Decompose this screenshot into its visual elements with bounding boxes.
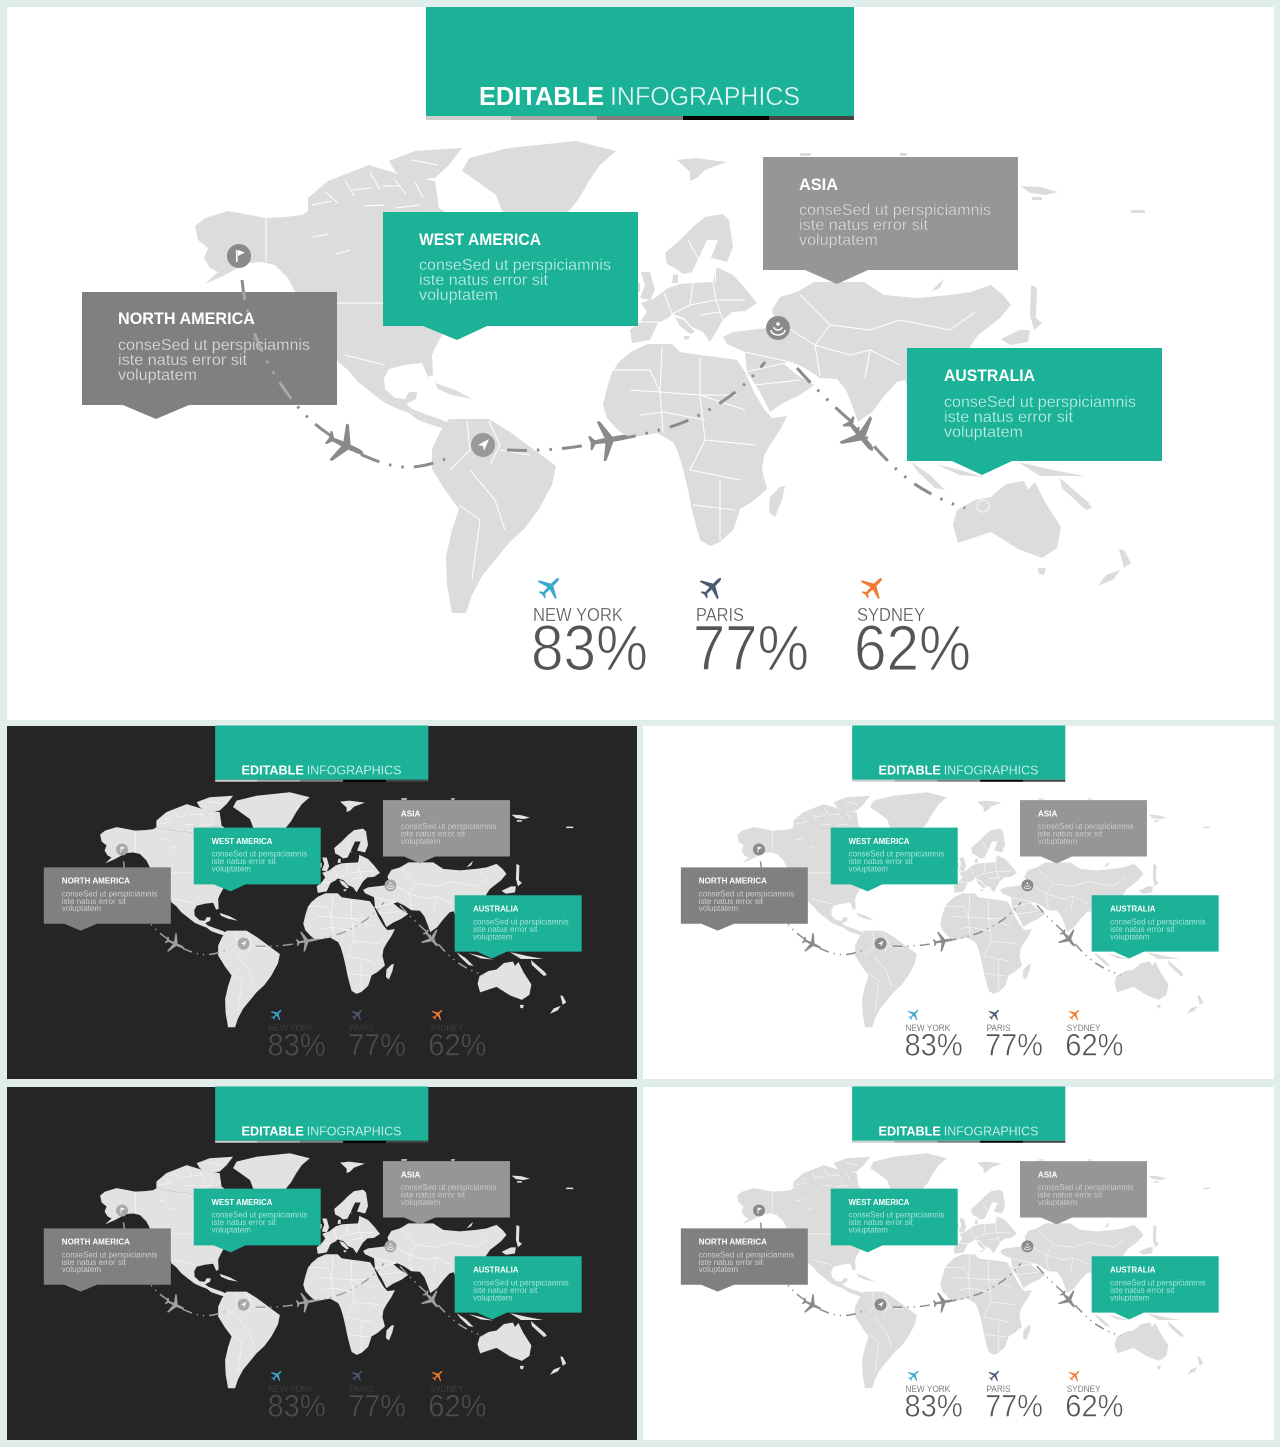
callout: asia [1020, 800, 1147, 863]
callout: west america: WEST AMERICA [849, 1197, 909, 1207]
callout: asia: voluptatem [401, 837, 441, 846]
callout: australia [1092, 1256, 1219, 1320]
title banner: INFOGRAPHICS [307, 1123, 402, 1138]
stat: paris: PARIS [987, 1384, 1011, 1394]
title banner: EDITABLE [879, 762, 941, 777]
stat: paris: 77% [985, 1027, 1043, 1063]
callout: north america [44, 1228, 171, 1292]
callout: north america [681, 1228, 808, 1292]
callout: west america [194, 828, 321, 891]
callout: west america: voluptatem [212, 1225, 251, 1234]
stat: paris [693, 569, 809, 684]
callout: west america: conseSed ut perspiciamnis [212, 849, 307, 858]
callout: australia [455, 895, 582, 959]
airplane 1 [319, 419, 372, 472]
callout: australia: AUSTRALIA [473, 904, 518, 914]
title banner: EDITABLE [879, 1123, 941, 1138]
callout: west america: iste natus error sit [419, 272, 549, 289]
callout: asia: iste natus error sit [401, 1191, 466, 1200]
callout: asia: iste natus error sit [401, 830, 466, 839]
callout: australia: conseSed ut perspiciamnis [473, 1279, 569, 1288]
airplane 3 [832, 408, 888, 463]
stat: sydney [1065, 1006, 1124, 1063]
stat: sydney: 62% [854, 612, 971, 684]
stat: new york: NEW YORK [905, 1023, 950, 1033]
flight route [124, 861, 484, 975]
callout: west america: WEST AMERICA [849, 836, 909, 846]
title banner: INFOGRAPHICS [944, 762, 1039, 777]
airplanes [162, 1286, 445, 1318]
callout: australia: AUSTRALIA [473, 1265, 518, 1275]
callout: north america: voluptatem [118, 367, 197, 384]
callout: australia: iste natus error sit [473, 1286, 538, 1295]
slide background [643, 726, 1274, 1079]
callout: australia: conseSed ut perspiciamnis [1110, 918, 1206, 927]
stat: sydney [854, 569, 971, 684]
callout: west america: voluptatem [419, 287, 498, 304]
callout: north america: NORTH AMERICA [62, 875, 130, 885]
callout: west america: WEST AMERICA [212, 1197, 272, 1207]
callout: australia: conseSed ut perspiciamnis [944, 394, 1136, 411]
callout: asia: conseSed ut perspiciamnis [1038, 1183, 1134, 1192]
slide background [643, 1087, 1274, 1440]
callout: west america [831, 1189, 958, 1252]
stat: sydney [428, 1367, 487, 1424]
stat: new york: NEW YORK [268, 1384, 313, 1394]
stat: new york: 83% [267, 1388, 326, 1424]
stat: sydney [1065, 1367, 1124, 1424]
stat: new york [267, 1367, 326, 1424]
world map [100, 792, 573, 1027]
callout: asia: conseSed ut perspiciamnis [1038, 822, 1134, 831]
callout: west america: WEST AMERICA [419, 230, 541, 249]
callout: asia: ASIA [1038, 1170, 1057, 1180]
stat: new york: NEW YORK [268, 1023, 313, 1033]
callout: north america: voluptatem [699, 904, 738, 913]
map pins [753, 1205, 1033, 1311]
callout: west america: iste natus error sit [212, 857, 277, 866]
callout: west america: iste natus error sit [849, 1218, 914, 1227]
title banner: INFOGRAPHICS [610, 81, 800, 111]
stat: sydney: SYDNEY [430, 1023, 464, 1033]
stat: new york: 83% [531, 612, 648, 684]
callout: north america: NORTH AMERICA [62, 1236, 130, 1246]
callout: north america: iste natus error sit [62, 1258, 127, 1267]
callout: asia [383, 1161, 510, 1224]
world map [195, 141, 1145, 613]
stat: new york [904, 1006, 963, 1063]
airplanes [799, 1286, 1082, 1318]
slide background [7, 726, 637, 1079]
stat: paris: 77% [348, 1388, 406, 1424]
stat: sydney: SYDNEY [857, 605, 925, 625]
callout: australia: voluptatem [473, 933, 513, 942]
title banner [426, 7, 854, 120]
world map [737, 1153, 1210, 1388]
callout: north america [44, 867, 171, 931]
callout: north america: conseSed ut perspiciamnis [118, 337, 310, 354]
slide contents [681, 1086, 1219, 1424]
stat: new york: NEW YORK [905, 1384, 950, 1394]
stat: paris: 77% [693, 612, 809, 684]
slide contents [44, 1086, 582, 1424]
callout: australia: conseSed ut perspiciamnis [473, 918, 569, 927]
callout: west america: conseSed ut perspiciamnis [212, 1210, 307, 1219]
title banner: INFOGRAPHICS [944, 1123, 1039, 1138]
callout: australia: iste natus error sit [1110, 925, 1175, 934]
stat: paris: PARIS [696, 605, 744, 625]
callout: australia: voluptatem [1110, 1294, 1150, 1303]
callout: north america: iste natus error sit [62, 897, 127, 906]
callout: north america: conseSed ut perspiciamnis [699, 1250, 794, 1259]
callout: australia [907, 348, 1162, 475]
title banner: EDITABLE [242, 762, 304, 777]
callout: asia: ASIA [1038, 809, 1057, 819]
stat: new york: 83% [904, 1388, 963, 1424]
callout: australia: voluptatem [1110, 933, 1150, 942]
callout: north america: voluptatem [699, 1265, 738, 1274]
callout: west america [383, 212, 638, 340]
map pins [116, 844, 396, 950]
callout: west america: voluptatem [849, 1225, 888, 1234]
slide background [7, 7, 1274, 720]
stat: paris [348, 1006, 406, 1063]
callout: north america: voluptatem [62, 1265, 101, 1274]
callout: north america: NORTH AMERICA [118, 309, 255, 328]
stat: new york [267, 1006, 326, 1063]
map pin: flag [227, 244, 251, 268]
callout: australia: iste natus error sit [1110, 1286, 1175, 1295]
stat: sydney: SYDNEY [1067, 1384, 1101, 1394]
callout: australia: AUSTRALIA [944, 366, 1035, 385]
destination ring [977, 500, 989, 512]
world map [100, 1153, 573, 1388]
callout: asia [763, 157, 1018, 284]
panel: small dark slide, row two [7, 725, 637, 1079]
stat: sydney [428, 1006, 487, 1063]
callout: west america: conseSed ut perspiciamnis [849, 1210, 944, 1219]
callout: australia [1092, 895, 1219, 959]
stat: paris [985, 1006, 1043, 1063]
flight route [761, 861, 1121, 975]
map pin: beacon [766, 316, 790, 340]
stat: paris: PARIS [350, 1384, 374, 1394]
callout: north america [82, 292, 337, 419]
title banner [852, 1086, 1065, 1143]
map pin: compass [471, 433, 495, 457]
flight route [242, 280, 965, 508]
slide background [7, 1087, 637, 1440]
stat: paris: 77% [348, 1027, 406, 1063]
callout: asia: voluptatem [799, 232, 878, 249]
flight route [761, 1222, 1121, 1336]
callout: asia: conseSed ut perspiciamnis [401, 822, 497, 831]
callout: asia: ASIA [401, 1170, 420, 1180]
callout: west america: voluptatem [849, 864, 888, 873]
callout: asia: iste natus error sit [1038, 1191, 1103, 1200]
callout: asia [1020, 1161, 1147, 1224]
callout: asia: voluptatem [401, 1198, 441, 1207]
callout: north america: iste natus error sit [699, 897, 764, 906]
airplanes [162, 925, 445, 957]
callout: west america: voluptatem [212, 864, 251, 873]
stat: sydney: 62% [428, 1388, 487, 1424]
callout: asia: iste natus error sit [799, 217, 929, 234]
title banner: INFOGRAPHICS [307, 762, 402, 777]
stat: new york [904, 1367, 963, 1424]
panel: small dark slide, row three [7, 1086, 637, 1440]
stat: sydney: SYDNEY [1067, 1023, 1101, 1033]
callout: asia [383, 800, 510, 863]
callout: australia: iste natus error sit [473, 925, 538, 934]
airplane 2 [586, 417, 631, 463]
map pins [753, 844, 1033, 950]
callout: australia: voluptatem [473, 1294, 513, 1303]
callout: north america: voluptatem [62, 904, 101, 913]
stat: paris [985, 1367, 1043, 1424]
stat: sydney: 62% [428, 1027, 487, 1063]
callout: north america: iste natus error sit [118, 352, 248, 369]
slide contents [44, 725, 582, 1063]
callout: asia: iste natus error sit [1038, 830, 1103, 839]
title banner: EDITABLE [479, 81, 604, 111]
stat: sydney: 62% [1065, 1388, 1124, 1424]
callout: north america: NORTH AMERICA [699, 875, 767, 885]
stat: paris: 77% [985, 1388, 1043, 1424]
callout: australia: iste natus error sit [944, 409, 1074, 426]
stat: paris [348, 1367, 406, 1424]
callout: west america: WEST AMERICA [212, 836, 272, 846]
map pins [116, 1205, 396, 1311]
panel: large light slide [7, 7, 1274, 720]
title banner [215, 725, 428, 782]
world map [737, 792, 1210, 1027]
stat: paris: PARIS [987, 1023, 1011, 1033]
callout: west america: iste natus error sit [849, 857, 914, 866]
callout: north america: conseSed ut perspiciamnis [62, 889, 157, 898]
callout: asia: ASIA [799, 175, 838, 194]
callout: asia: conseSed ut perspiciamnis [401, 1183, 497, 1192]
callout: west america: conseSed ut perspiciamnis [849, 849, 944, 858]
stat: new york: 83% [904, 1027, 963, 1063]
callout: north america [681, 867, 808, 931]
flight route [124, 1222, 484, 1336]
callout: australia: conseSed ut perspiciamnis [1110, 1279, 1206, 1288]
callout: west america: conseSed ut perspiciamnis [419, 257, 611, 274]
callout: north america: iste natus error sit [699, 1258, 764, 1267]
stat: sydney: 62% [1065, 1027, 1124, 1063]
callout: asia: voluptatem [1038, 1198, 1078, 1207]
callout: west america [831, 828, 958, 891]
callout: west america [194, 1189, 321, 1252]
callout: asia: voluptatem [1038, 837, 1078, 846]
title banner [215, 1086, 428, 1143]
callout: asia: ASIA [401, 809, 420, 819]
panel: small light slide, row three [643, 1086, 1274, 1440]
callout: asia: conseSed ut perspiciamnis [799, 202, 991, 219]
callout: australia: AUSTRALIA [1110, 904, 1155, 914]
callout: australia: AUSTRALIA [1110, 1265, 1155, 1275]
callout: north america: NORTH AMERICA [699, 1236, 767, 1246]
stat: new york: NEW YORK [533, 605, 623, 625]
title banner [852, 725, 1065, 782]
callout: north america: conseSed ut perspiciamnis [699, 889, 794, 898]
stat: paris: PARIS [350, 1023, 374, 1033]
stat: new york: 83% [267, 1027, 326, 1063]
airplanes [799, 925, 1082, 957]
callout: australia: voluptatem [944, 424, 1023, 441]
slide contents [681, 725, 1219, 1063]
panel: small light slide, row two [643, 725, 1274, 1079]
callout: west america: iste natus error sit [212, 1218, 277, 1227]
callout: australia [455, 1256, 582, 1320]
stat: sydney: SYDNEY [430, 1384, 464, 1394]
callout: north america: conseSed ut perspiciamnis [62, 1250, 157, 1259]
title banner: EDITABLE [242, 1123, 304, 1138]
stat: new york [531, 569, 648, 684]
